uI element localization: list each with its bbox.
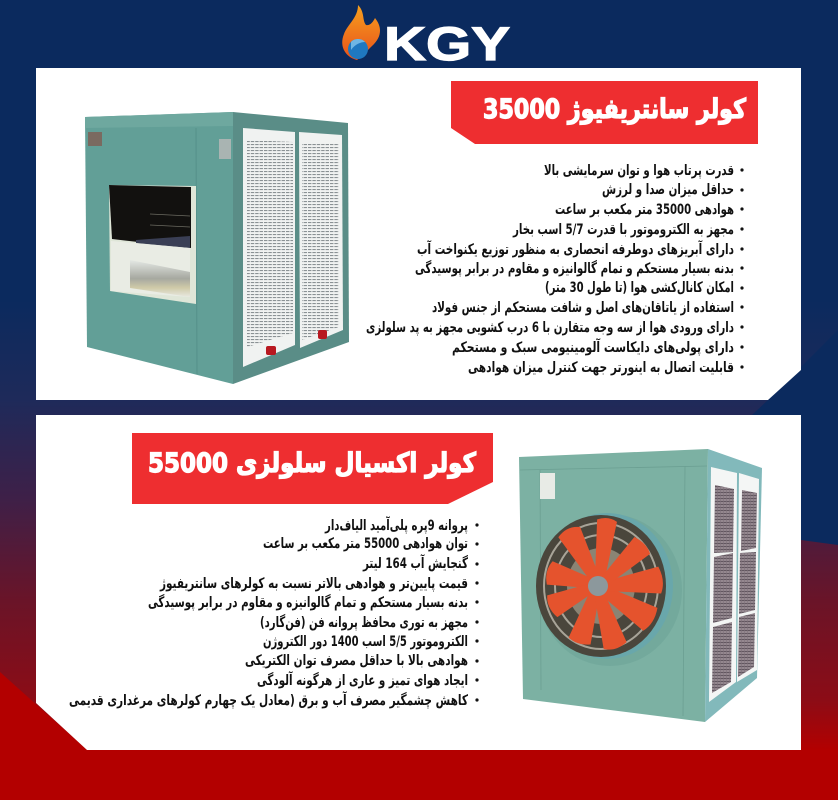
- feature list: [366, 163, 744, 376]
- feature list: دارای پولی‌های دایکاست آلومینیومی سبک و مستحکم: [452, 338, 734, 356]
- logo: KGY: [342, 5, 510, 70]
- panel: centrifugal cooler 35000: [36, 68, 801, 400]
- heading banner: کولر اکسیال سلولزی 55000: [148, 448, 476, 479]
- feature list: مجهز به الکتروموتور با قدرت 5/7 اسب بخار: [512, 222, 734, 238]
- heading banner: کولر سانتریفیوژ 35000: [483, 94, 746, 125]
- left filter panel: [243, 128, 295, 367]
- side face: [705, 449, 762, 722]
- feature list: کاهش چشمگیر مصرف آب و برق (معادل یک چهارم کولرهای مرغداری قدیمی: [69, 691, 468, 709]
- image: axial cooler: [519, 449, 762, 722]
- feature list: توان هوادهی 55000 متر مکعب بر ساعت: [263, 536, 468, 552]
- nameplate: [88, 132, 102, 146]
- fan: [536, 513, 682, 666]
- feature list: قابلیت اتصال به اینورتر جهت کنترل میزان هوادهی: [468, 360, 734, 376]
- feature list: پروانه 9پره پلی‌آمید الیاف‌دار: [324, 516, 468, 534]
- front face: [85, 112, 233, 384]
- feature list: امکان کانال‌کشی هوا (تا طول 30 متر): [545, 280, 734, 296]
- feature list: هوادهی 35000 متر مکعب بر ساعت: [555, 202, 734, 218]
- feature list: دارای ورودی هوا از سه وجه متقارن با 6 درب کشویی مجهز به پد سلولزی: [366, 320, 734, 336]
- feature list: گنجایش آب 164 لیتر: [362, 554, 468, 572]
- logo wordmark: KGY: [384, 17, 510, 70]
- feature list: حداقل میزان صدا و لرزش: [602, 182, 734, 198]
- heading banner: [451, 81, 758, 144]
- feature list: هوادهی بالا با حداقل مصرف توان الکتریکی: [245, 653, 468, 669]
- seam: [196, 128, 197, 374]
- air outlet opening: [109, 185, 196, 304]
- hub: [588, 576, 608, 596]
- white filter frames: [709, 467, 737, 702]
- feature list: الکتروموتور 5/5 اسب 1400 دور الکتروژن: [263, 634, 468, 650]
- feature list: بدنه بسیار مستحکم و تمام گالوانیزه و مقاوم در برابر پوسیدگی: [148, 593, 468, 611]
- front face: [519, 449, 708, 722]
- image: centrifugal cooler: [85, 112, 349, 384]
- feature list: [69, 516, 479, 709]
- heading banner: [132, 433, 493, 504]
- panel: axial cellulose cooler 55000: [36, 415, 801, 750]
- fan blades: [544, 517, 664, 652]
- cellulose pads: [714, 485, 734, 553]
- icon: flame and drop: [342, 5, 380, 60]
- right filter panel: [299, 132, 343, 348]
- nameplate: [540, 473, 555, 499]
- side face: [233, 112, 349, 384]
- feature list: مجهز به توری محافظ پروانه فن (فن‌گارد): [260, 613, 468, 631]
- feature list: قیمت پایین‌تر و هوادهی بالاتر نسبت به کولرهای سانتریفیوژ: [159, 576, 468, 592]
- feature list: قدرت پرتاب هوا و توان سرمایشی بالا: [544, 163, 734, 179]
- indicator lights: [266, 346, 276, 355]
- feature list: ایجاد هوای تمیز و عاری از هرگونه آلودگی: [257, 671, 468, 689]
